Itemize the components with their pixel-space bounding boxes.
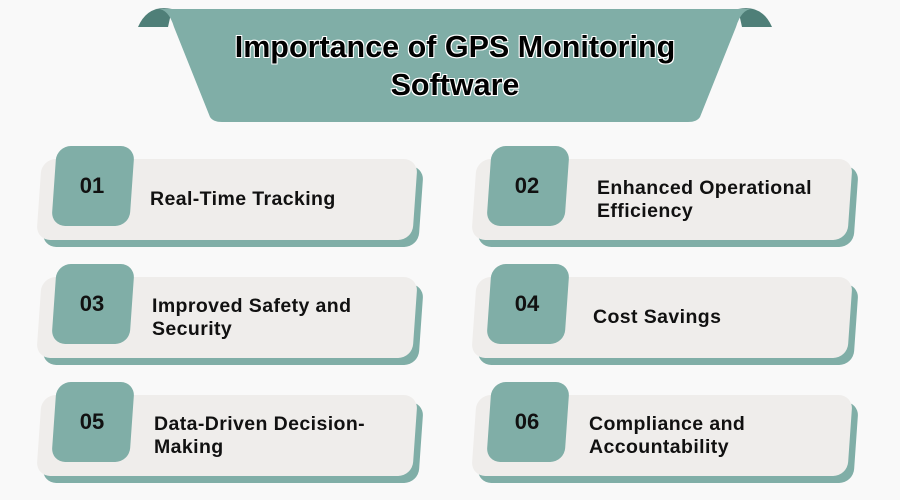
card 03: [37, 264, 423, 365]
card 04: 04: [515, 291, 539, 316]
title text: [235, 30, 675, 102]
card 06: Compliance and: [589, 412, 745, 434]
card 01: Real-Time Tracking: [150, 188, 336, 210]
card 02: [472, 146, 858, 247]
card 03: Improved Safety and: [152, 294, 351, 316]
card 01: [37, 146, 423, 247]
card 06: Accountability: [589, 436, 729, 458]
title banner: [138, 8, 772, 122]
card 05: Data-Driven Decision-: [154, 412, 365, 434]
title text: Importance of GPS Monitoring: [235, 30, 675, 64]
card 06: [472, 382, 858, 483]
card 04: [472, 264, 858, 365]
card 03: Security: [152, 318, 232, 340]
card 06: 06: [515, 409, 539, 434]
card 01: 01: [80, 173, 104, 198]
card 05: Making: [154, 436, 224, 458]
card 05: 05: [80, 409, 104, 434]
title text: Software: [391, 68, 519, 102]
card 02: Efficiency: [597, 200, 693, 222]
card 04: Cost Savings: [593, 306, 721, 328]
card 02: 02: [515, 173, 539, 198]
card 05: [37, 382, 423, 483]
card 02: Enhanced Operational: [597, 176, 812, 198]
card 03: 03: [80, 291, 104, 316]
